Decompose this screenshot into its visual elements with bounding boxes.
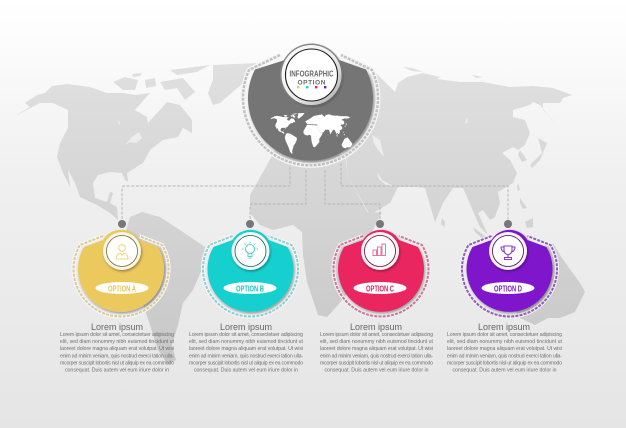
hub subtitle: OPTION — [298, 80, 326, 87]
text A: elit, sed diam nonummy nibh euismod tincidunt ut — [60, 339, 175, 345]
connector node D — [504, 220, 512, 228]
text A: mcorper suscipit lobortis nisl ut aliquip ex ea commodo — [60, 360, 174, 366]
text D: Lorem ipsum dolor sit amet, consectetuer adipiscing — [447, 332, 562, 338]
hub title badge — [280, 44, 343, 106]
hub title: INFOGRAPHIC — [290, 70, 334, 79]
connector node B — [246, 220, 254, 228]
text D: elit, sed diam nonummy nibh euismod tincidunt ut — [447, 339, 563, 345]
pill B — [224, 282, 276, 294]
text C: Lorem ipsum dolor sit amet, consectetuer adipiscing — [320, 332, 433, 338]
pill C — [354, 282, 406, 294]
world map background — [15, 63, 585, 365]
text B: enim ad minim veniam, quis nostrud exerci tation ulla- — [189, 354, 303, 360]
connector node A — [118, 220, 126, 228]
text C — [320, 332, 434, 374]
text B: consequat. Duis autem vel eum iriure dolor in — [194, 368, 298, 374]
heading A: Lorem ipsum — [91, 322, 143, 332]
option C panel — [320, 220, 434, 374]
text B: Lorem ipsum dolor sit amet, consectetuer adipiscing — [189, 332, 303, 338]
option D panel — [447, 220, 563, 374]
icon: trophy — [501, 246, 515, 260]
text A: enim ad minim veniam, quis nostrud exerci tation ulla- — [60, 354, 174, 360]
disk C — [334, 230, 428, 316]
text C: laoreet dolore magna aliquam erat volutpat. Ut wisi — [320, 346, 433, 352]
text A: laoreet dolore magna aliquam erat volutpat. Ut wisi — [60, 346, 174, 352]
label B: OPTION B — [236, 283, 264, 293]
text C: enim ad minim veniam, quis nostrud exerci tation ulla- — [320, 354, 433, 360]
text B: elit, sed diam nonummy nibh euismod tincidunt ut — [189, 339, 304, 345]
heading B: Lorem ipsum — [220, 322, 272, 332]
disk A — [74, 230, 168, 316]
hub dashed ring — [243, 55, 378, 165]
icon: bar chart — [373, 244, 386, 256]
text C: consequat. Duis autem vel eum iriure dolor in — [324, 368, 429, 374]
dashed connectors — [122, 163, 508, 220]
text D: enim ad minim veniam, quis nostrud exerci tation ulla- — [447, 354, 562, 360]
hub mini world map — [269, 113, 352, 154]
text D: mcorper suscipit lobortis nisl ut aliquip ex ea commodo — [447, 360, 562, 366]
colour dots — [297, 86, 326, 88]
text D: laoreet dolore magna aliquam erat volutpat. Ut wisi — [447, 346, 562, 352]
option A panel — [60, 220, 175, 374]
label D: OPTION D — [494, 283, 522, 293]
text D — [447, 332, 563, 374]
disk B — [203, 230, 298, 316]
pill D — [482, 282, 534, 294]
text B: mcorper suscipit lobortis nisl ut aliquip ex ea commodo — [189, 360, 303, 366]
heading D: Lorem ipsum — [478, 322, 530, 332]
text A: consequat. Duis autem vel eum iriure dolor in — [65, 368, 169, 374]
icon: person — [116, 245, 128, 259]
text C: mcorper suscipit lobortis nisl ut aliquip ex ea commodo — [320, 360, 433, 366]
icon: light bulb — [242, 242, 258, 258]
central hub panel — [243, 44, 378, 165]
label C: OPTION C — [366, 283, 394, 293]
hub grey disk — [248, 45, 373, 161]
heading C: Lorem ipsum — [350, 322, 402, 332]
disk D — [462, 230, 557, 316]
label A: OPTION A — [108, 283, 136, 293]
text C: elit, sed diam nonummy nibh euismod tincidunt ut — [320, 339, 434, 345]
text A: Lorem ipsum dolor sit amet, consectetuer adipiscing — [60, 332, 174, 338]
text B — [189, 332, 304, 374]
text A — [60, 332, 175, 374]
text B: laoreet dolore magna aliquam erat volutpat. Ut wisi — [189, 346, 303, 352]
text D: consequat. Duis autem vel eum iriure dolor in — [452, 368, 557, 374]
connector node C — [376, 220, 384, 228]
option B panel — [189, 220, 304, 374]
pill A — [96, 282, 148, 294]
